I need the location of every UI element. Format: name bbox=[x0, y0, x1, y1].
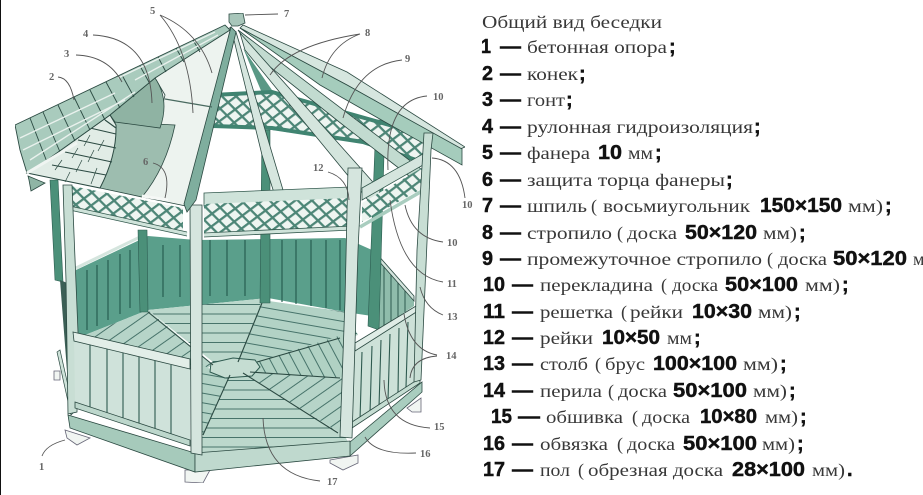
item 14: ; bbox=[789, 380, 796, 402]
far left post and lattice side bbox=[57, 280, 74, 415]
callout 4 bbox=[83, 29, 152, 103]
item 14: перила bbox=[540, 381, 602, 401]
item 17 bbox=[483, 459, 853, 481]
item 9: промежуточное стропило bbox=[527, 249, 762, 269]
item 12: ; bbox=[694, 327, 701, 349]
callout 16: 16 bbox=[420, 449, 430, 460]
callout 12 bbox=[313, 163, 349, 200]
callout 6: 6 bbox=[143, 157, 148, 168]
main rafter bbox=[240, 33, 380, 211]
item 13 bbox=[483, 353, 787, 375]
front left railing panel bbox=[73, 332, 190, 446]
item 1: ; bbox=[669, 36, 676, 58]
item 16: мм) bbox=[762, 434, 795, 455]
callout 14 bbox=[404, 314, 457, 378]
far rafter bbox=[240, 28, 462, 165]
item 12: — bbox=[512, 327, 533, 349]
item 3: ; bbox=[566, 89, 573, 111]
callout 3 bbox=[64, 49, 122, 82]
item 16: ; bbox=[797, 433, 804, 455]
item 5: мм bbox=[628, 143, 653, 163]
item 10: — bbox=[512, 274, 533, 296]
item 4: 4 bbox=[482, 116, 494, 138]
item 13: 100×100 bbox=[653, 353, 737, 375]
item 10: мм) bbox=[805, 275, 840, 296]
item 14: доска bbox=[618, 381, 667, 401]
item 11 bbox=[483, 301, 801, 323]
roof: far sheet and rafters bbox=[233, 25, 465, 218]
item 16: 50×100 bbox=[683, 433, 757, 455]
item 2 bbox=[482, 63, 586, 85]
item 8: стропило bbox=[527, 223, 612, 243]
item 12: мм bbox=[667, 328, 692, 348]
item 2: — bbox=[500, 63, 521, 85]
item 11: рейки bbox=[630, 302, 683, 322]
eave overhang bbox=[28, 176, 45, 191]
item 7: 150×150 bbox=[760, 195, 842, 217]
callout 4: 4 bbox=[83, 29, 89, 40]
item 6: 6 bbox=[482, 169, 493, 191]
item 16: обвязка bbox=[540, 434, 608, 454]
callout 14: 14 bbox=[446, 351, 457, 362]
callout 10 lower bbox=[405, 205, 458, 249]
item 4 bbox=[482, 116, 761, 138]
front left post bbox=[190, 205, 202, 455]
callout 10 top: 10 bbox=[433, 92, 444, 103]
callout 15 bbox=[384, 380, 444, 433]
item 9: 9 bbox=[482, 248, 493, 270]
callout 7 bbox=[245, 9, 289, 20]
item 10: 10 bbox=[483, 274, 505, 296]
callout 9: 9 bbox=[405, 54, 410, 65]
right lattice panel bbox=[360, 150, 430, 227]
item 10: доска bbox=[672, 275, 718, 295]
item 17: пол bbox=[540, 460, 570, 480]
item 4: ; bbox=[754, 116, 761, 138]
item 10: ; bbox=[842, 274, 849, 296]
spire bbox=[229, 13, 245, 26]
callout 15: 15 bbox=[434, 422, 444, 433]
callout 17: 17 bbox=[327, 477, 338, 488]
item 11: решетка bbox=[540, 302, 613, 322]
item 8 bbox=[482, 222, 806, 244]
callout 10 right bbox=[432, 158, 472, 211]
item 8: доска bbox=[627, 223, 677, 243]
item 5: — bbox=[500, 142, 521, 164]
item 8: ; bbox=[799, 222, 806, 244]
callout 6 bbox=[143, 157, 167, 198]
item 7: ( bbox=[591, 196, 597, 217]
item 14: ( bbox=[608, 381, 614, 402]
callout 12: 12 bbox=[313, 163, 324, 174]
concrete footings bbox=[54, 371, 421, 483]
callout 5: 5 bbox=[150, 6, 155, 17]
ceiling hip rafter bbox=[243, 48, 274, 93]
item 6: — bbox=[500, 169, 521, 191]
item 8: ( bbox=[617, 223, 623, 244]
item 6: защита торца фанеры bbox=[527, 170, 725, 190]
item 17: обрезная доска bbox=[588, 460, 723, 480]
item 9: 50×120 bbox=[833, 248, 907, 270]
front base bbox=[68, 415, 350, 472]
right base beam bbox=[350, 382, 422, 456]
back posts bbox=[50, 120, 385, 330]
roof: left plywood bbox=[142, 27, 231, 206]
shingles bbox=[27, 115, 116, 188]
legend title: Общий вид беседки bbox=[482, 12, 662, 32]
callout 17 bbox=[263, 418, 338, 488]
item 13: брус bbox=[605, 354, 645, 374]
item 13: столб bbox=[540, 354, 588, 374]
item 3: гонт bbox=[527, 90, 565, 110]
callout 11 bbox=[390, 200, 457, 290]
plywood edge guard bbox=[142, 196, 168, 200]
item 2: ; bbox=[579, 63, 586, 85]
legend bbox=[481, 12, 923, 481]
item 12: 12 bbox=[483, 327, 505, 349]
item 16: — bbox=[512, 433, 533, 455]
item 14: мм) bbox=[753, 381, 787, 402]
item 5: 10 bbox=[598, 142, 622, 164]
item 17: ( bbox=[578, 460, 584, 481]
item 13: мм) bbox=[743, 354, 778, 375]
callout 10 right: 10 bbox=[462, 200, 472, 211]
image left border bbox=[0, 0, 1, 495]
right railing panel bbox=[352, 303, 421, 428]
waterproofing membrane bbox=[100, 122, 175, 197]
item 16 bbox=[483, 433, 804, 455]
item 2: 2 bbox=[482, 63, 493, 85]
callout 8 bbox=[270, 28, 370, 78]
back walls bbox=[76, 236, 372, 335]
item 1: 1 bbox=[481, 36, 491, 58]
item 4: рулонная гидроизоляция bbox=[527, 117, 753, 137]
item 9: — bbox=[500, 248, 521, 270]
item 7: ; bbox=[885, 195, 892, 217]
item 12: 10×50 bbox=[602, 327, 660, 349]
item 15: 15 bbox=[491, 406, 512, 428]
callout 11: 11 bbox=[447, 279, 457, 290]
left lattice panel bbox=[65, 186, 187, 236]
front lattice panel bbox=[204, 187, 352, 237]
item 11: 10×30 bbox=[692, 301, 752, 323]
item 13: ; bbox=[780, 353, 787, 375]
item 5 bbox=[482, 142, 662, 164]
ridge band bbox=[15, 25, 230, 173]
item 15: ; bbox=[800, 406, 807, 428]
item 16: 16 bbox=[483, 433, 505, 455]
item 10: 50×100 bbox=[725, 274, 798, 296]
item 7 bbox=[482, 195, 892, 217]
item 7: шпиль bbox=[527, 196, 587, 216]
inner rafter bbox=[233, 32, 286, 218]
item 16: ( bbox=[617, 434, 623, 455]
item 11: мм) bbox=[758, 302, 792, 323]
item 8: — bbox=[500, 222, 521, 244]
item 5: фанера bbox=[527, 143, 590, 163]
item 15: ( bbox=[632, 407, 638, 428]
upper membrane bbox=[110, 78, 164, 128]
front right post bbox=[340, 168, 362, 438]
callout 9 bbox=[343, 54, 410, 118]
item 11: 11 bbox=[483, 301, 505, 323]
item 7: восьмиугольник bbox=[603, 196, 750, 216]
callout 2: 2 bbox=[49, 72, 54, 83]
callout 8: 8 bbox=[365, 28, 370, 39]
item 11: ( bbox=[621, 302, 627, 323]
callouts bbox=[39, 6, 472, 488]
item 11: — bbox=[512, 301, 533, 323]
roof edge rafter bbox=[184, 27, 236, 212]
item 14: — bbox=[512, 380, 533, 402]
item 2: конек bbox=[527, 64, 578, 84]
callout 16 bbox=[365, 437, 430, 460]
illustration: gazebo bbox=[15, 13, 465, 483]
floor bbox=[85, 298, 358, 455]
callout 13 bbox=[420, 287, 458, 323]
item 10 bbox=[483, 274, 849, 296]
callout 1: 1 bbox=[39, 462, 44, 473]
item 14 bbox=[483, 380, 796, 402]
callout 7: 7 bbox=[284, 9, 289, 20]
callout 1 bbox=[39, 440, 65, 473]
item 1: — bbox=[500, 36, 521, 58]
item 1: бетонная опора bbox=[527, 37, 667, 57]
back lattice bbox=[213, 92, 425, 165]
item 5: 5 bbox=[482, 142, 493, 164]
item 15: — bbox=[518, 406, 540, 428]
intermediate rafter bbox=[238, 30, 425, 186]
item 15: обшивка bbox=[546, 407, 623, 427]
item 17: — bbox=[512, 459, 533, 481]
item 12 bbox=[483, 327, 701, 349]
item 3: — bbox=[500, 89, 521, 111]
item 12: рейки bbox=[540, 328, 593, 348]
item 10: перекладина bbox=[540, 275, 653, 295]
roof sheet bbox=[240, 25, 465, 149]
item 13: — bbox=[512, 353, 533, 375]
left post bbox=[63, 185, 78, 414]
item 7: мм) bbox=[848, 196, 883, 217]
item 7: 7 bbox=[482, 195, 493, 217]
item 8: 8 bbox=[482, 222, 493, 244]
back right wall panel bbox=[377, 254, 414, 330]
item 3: 3 bbox=[482, 89, 493, 111]
item 9: доска bbox=[778, 249, 827, 269]
callout 2 bbox=[49, 72, 74, 100]
item 14: 14 bbox=[483, 380, 506, 402]
item 15: мм) bbox=[765, 407, 798, 428]
callout 10 lower: 10 bbox=[447, 238, 458, 249]
callout 13: 13 bbox=[447, 312, 458, 323]
item 17: . bbox=[847, 459, 853, 481]
item 13: 13 bbox=[483, 353, 505, 375]
item 6 bbox=[482, 169, 733, 191]
item 4: — bbox=[500, 116, 521, 138]
item 6: ; bbox=[726, 169, 733, 191]
callout 10 top bbox=[388, 92, 444, 170]
item 14: 50×100 bbox=[673, 380, 747, 402]
item 9: ( bbox=[767, 249, 773, 270]
item 17: 28×100 bbox=[732, 459, 805, 481]
callout 5 bbox=[150, 6, 212, 113]
item 11: ; bbox=[794, 301, 801, 323]
item 5: ; bbox=[655, 142, 662, 164]
callout 3: 3 bbox=[64, 49, 69, 60]
item 15: 10×80 bbox=[700, 406, 757, 428]
right post bbox=[414, 133, 433, 382]
item 9 bbox=[482, 248, 923, 270]
item 15: доска bbox=[642, 407, 690, 427]
item 8: 50×120 bbox=[685, 222, 757, 244]
item 8: мм) bbox=[763, 223, 797, 244]
item 10: ( bbox=[661, 275, 667, 296]
item 16: доска bbox=[627, 434, 675, 454]
item 17: 17 bbox=[483, 459, 505, 481]
plywood seam bbox=[165, 99, 212, 107]
item 13: ( bbox=[595, 354, 601, 375]
item 1 bbox=[481, 36, 676, 58]
item 17: мм) bbox=[812, 460, 845, 481]
item 15 bbox=[491, 406, 807, 428]
item 3 bbox=[482, 89, 573, 111]
item 7: — bbox=[500, 195, 521, 217]
